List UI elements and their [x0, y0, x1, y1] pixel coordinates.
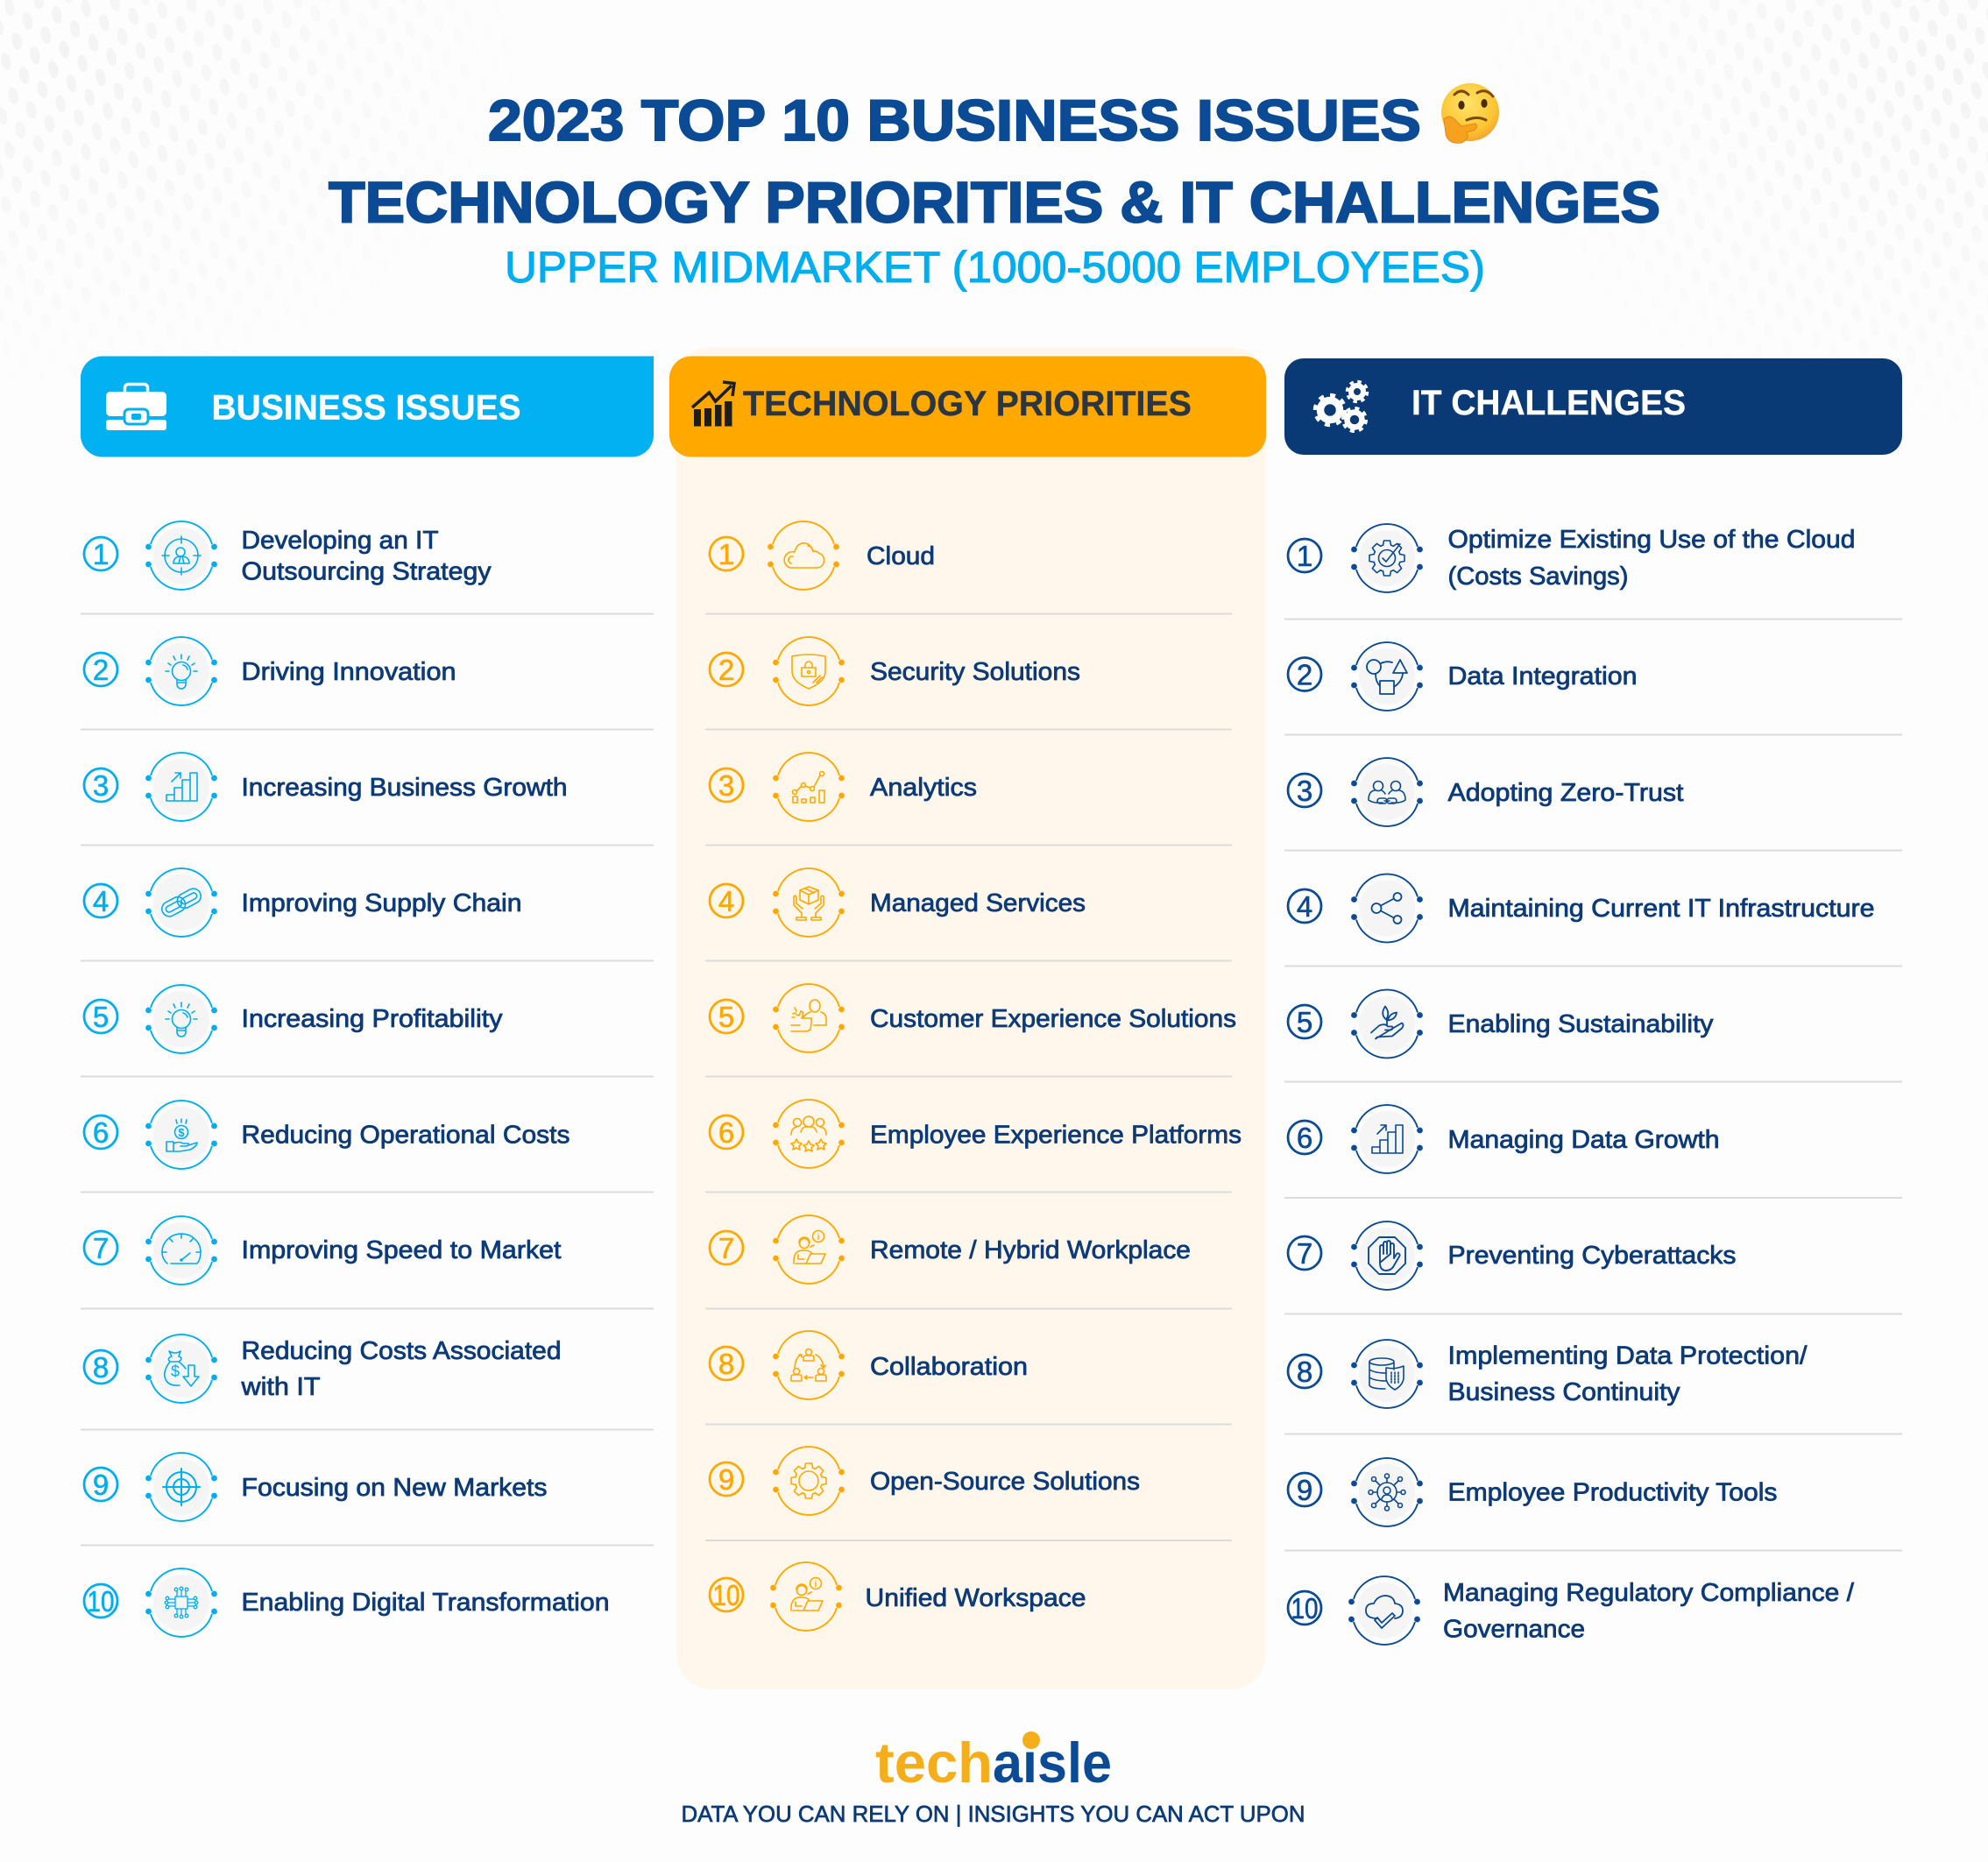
- item text: Enabling Digital Transformation: [242, 1589, 610, 1617]
- number 7: 7: [718, 1232, 734, 1264]
- item 9: open-source solutions: [710, 1447, 1140, 1515]
- item 1: cloud: [710, 521, 935, 590]
- item 4: maintaining current IT infrastructure: [1288, 874, 1875, 942]
- item 3: adopting zero-trust: [1288, 758, 1684, 826]
- logo: techaisle: [875, 1731, 1112, 1795]
- number 6: 6: [718, 1116, 734, 1149]
- item text: Security Solutions: [870, 658, 1080, 686]
- icon: rising bar chart: [692, 382, 734, 426]
- number 7: 7: [1297, 1237, 1312, 1270]
- item text: Preventing Cyberattacks: [1447, 1242, 1737, 1270]
- item text: Improving Supply Chain: [242, 889, 522, 917]
- number 3: 3: [718, 769, 734, 802]
- item text: (Costs Savings): [1447, 563, 1628, 591]
- item 5: customer experience solutions: [710, 984, 1236, 1052]
- number 10: 10: [88, 1585, 114, 1618]
- number 5: [710, 1000, 743, 1033]
- number 7: [84, 1231, 117, 1264]
- number 4: 4: [93, 885, 109, 917]
- number 8: [84, 1350, 117, 1384]
- item 9: employee productivity tools: [1288, 1458, 1777, 1526]
- item text: Employee Experience Platforms: [870, 1122, 1242, 1150]
- icon: collaboration cycle: [773, 1331, 845, 1399]
- icon: analytics chart: [773, 753, 845, 821]
- icon: gear: [773, 1447, 845, 1515]
- item text: Open-Source Solutions: [870, 1468, 1140, 1496]
- item text: Optimize Existing Use of the Cloud: [1447, 526, 1856, 554]
- number 8: [1288, 1355, 1321, 1388]
- number 5: [84, 1000, 117, 1033]
- item 6: managing data growth: [1288, 1105, 1719, 1173]
- item text: Increasing Business Growth: [242, 774, 568, 802]
- number 9: [1288, 1473, 1321, 1506]
- title: TECHNOLOGY PRIORITIES & IT CHALLENGES: [329, 170, 1660, 235]
- number 9: 9: [718, 1463, 734, 1496]
- logo: techaisle: aisle: [993, 1731, 1112, 1795]
- number 9: 9: [93, 1469, 109, 1501]
- number 7: [1288, 1236, 1321, 1270]
- number 2: [1288, 657, 1321, 690]
- number 3: 3: [1297, 775, 1312, 807]
- item 8: collaboration: [710, 1331, 1028, 1399]
- icon: hand with coin: [145, 1101, 217, 1169]
- icon: person network: [1351, 1458, 1423, 1526]
- title: 2023 TOP 10 BUSINESS ISSUES: [488, 88, 1421, 152]
- number 5: 5: [718, 1001, 734, 1033]
- item text: Employee Productivity Tools: [1447, 1479, 1777, 1507]
- item text: [1443, 1579, 1855, 1644]
- number 1: [1288, 539, 1321, 572]
- item 9: focusing on new markets: [84, 1453, 547, 1521]
- number 5: 5: [1297, 1006, 1312, 1038]
- header: business issues: BUSINESS ISSUES: [212, 389, 520, 428]
- panel: IT challenges: [1284, 358, 1902, 1645]
- number 6: 6: [93, 1116, 109, 1149]
- item text: Analytics: [870, 774, 977, 802]
- icon: growth bars: [145, 753, 217, 821]
- number 4: [1288, 889, 1321, 923]
- number 4: [84, 884, 117, 917]
- item 2: driving innovation: [84, 637, 456, 705]
- panel: technology priorities: [669, 356, 1266, 1631]
- icon: thinking face emoji: [1441, 83, 1499, 143]
- item 7: preventing cyberattacks: [1288, 1221, 1737, 1290]
- icon: money bag with arrow: $: [171, 1363, 180, 1380]
- item 1: optimize existing use of the cloud: [1288, 524, 1856, 592]
- icon: light bulb: [145, 985, 217, 1053]
- icon: customer thumbs up: [773, 984, 845, 1052]
- item 6: employee experience platforms: [710, 1100, 1242, 1168]
- item text: Driving Innovation: [242, 658, 456, 686]
- number 7: 7: [93, 1232, 109, 1264]
- number 1: 1: [93, 538, 109, 570]
- item 8: reducing costs associated with IT: [84, 1335, 561, 1403]
- item 5: enabling sustainability: [1288, 990, 1714, 1058]
- number 8: 8: [718, 1348, 734, 1380]
- item text: [1447, 1342, 1808, 1406]
- tagline: DATA YOU CAN RELY ON | INSIGHTS YOU CAN ACT UPON: [682, 1802, 1305, 1827]
- item 10: unified workspace: [710, 1562, 1086, 1631]
- icon: hands holding box: [773, 868, 845, 937]
- item 6: reducing operational costs: [84, 1101, 570, 1169]
- number 2: 2: [1297, 659, 1312, 690]
- header: business issues: [81, 356, 654, 457]
- item text: [240, 1337, 561, 1401]
- number 9: [710, 1462, 743, 1496]
- logo: techaisle: tech: [875, 1731, 993, 1795]
- icon: gear check: [1351, 524, 1423, 592]
- item text: Maintaining Current IT Infrastructure: [1447, 895, 1875, 923]
- item 2: security solutions: [710, 637, 1080, 705]
- item text: Business Continuity: [1447, 1378, 1680, 1406]
- number 6: 6: [1297, 1122, 1312, 1154]
- number 2: 2: [718, 654, 734, 686]
- item text: Cloud: [867, 542, 935, 570]
- icon: team with stars: [773, 1100, 845, 1168]
- header: technology priorities: [669, 356, 1266, 457]
- icon: light bulb: [145, 637, 217, 705]
- item text: Focusing on New Markets: [242, 1474, 547, 1502]
- item 1: developing an IT outsourcing strategy: [84, 521, 492, 590]
- item text: Collaboration: [870, 1353, 1028, 1381]
- number 7: [710, 1231, 743, 1264]
- number 4: 4: [1297, 890, 1312, 923]
- item text: Adopting Zero-Trust: [1447, 779, 1684, 807]
- item text: [1447, 526, 1856, 591]
- item text: Reducing Operational Costs: [242, 1122, 570, 1150]
- number 8: [710, 1347, 743, 1380]
- item 4: improving supply chain: [84, 868, 522, 937]
- icon: shapes integration: [1351, 642, 1423, 711]
- item text: Increasing Profitability: [242, 1005, 503, 1033]
- icon: share nodes: [1351, 874, 1423, 942]
- item text: with IT: [240, 1373, 321, 1401]
- icon: cloud with check: [1348, 1576, 1420, 1645]
- icon: remote worker: [770, 1562, 842, 1631]
- number 2: 2: [93, 654, 109, 686]
- number 10: 10: [713, 1579, 739, 1611]
- icon: money bag with arrow: [145, 1335, 217, 1403]
- item text: Managing Data Growth: [1447, 1126, 1719, 1154]
- panel: business issues: [81, 356, 654, 1637]
- item 2: data integration: [1288, 642, 1637, 711]
- number 3: 3: [93, 769, 109, 802]
- number 10: 10: [1291, 1592, 1318, 1625]
- icon: remote worker: [773, 1215, 845, 1284]
- item text: Implementing Data Protection/: [1447, 1342, 1808, 1370]
- item text: Customer Experience Solutions: [870, 1005, 1236, 1033]
- icon: chip circuit: [145, 1568, 217, 1637]
- number 3: [84, 768, 117, 802]
- number 6: [84, 1115, 117, 1149]
- header: IT challenges: IT CHALLENGES: [1411, 384, 1686, 422]
- item 7: improving speed to market: [84, 1216, 561, 1285]
- item 5: increasing profitability: [84, 985, 503, 1053]
- header: technology priorities: TECHNOLOGY PRIORITIES: [743, 385, 1192, 423]
- item text: Outsourcing Strategy: [242, 557, 492, 585]
- icon: briefcase: [106, 384, 166, 430]
- item 4: managed services: [710, 868, 1086, 937]
- item text: Managing Regulatory Compliance /: [1443, 1579, 1855, 1607]
- number 2: [710, 653, 743, 686]
- icon: hand with coin: $: [178, 1126, 185, 1139]
- number 4: 4: [718, 885, 734, 917]
- number 9: 9: [1297, 1474, 1312, 1506]
- item 10: enabling digital transformation: [84, 1568, 610, 1637]
- number 2: [84, 653, 117, 686]
- number 1: 1: [718, 538, 734, 570]
- icon: stop hand: [1351, 1221, 1423, 1290]
- icon: two people linked: [1351, 758, 1423, 826]
- item text: Developing an IT: [242, 527, 439, 555]
- subtitle: UPPER MIDMARKET (1000-5000 EMPLOYEES): [505, 243, 1485, 292]
- item text: Improving Speed to Market: [242, 1236, 561, 1264]
- icon: shield lock: [773, 637, 845, 705]
- number 4: [710, 884, 743, 917]
- number 3: [710, 768, 743, 802]
- panel: cream background of technology priorities: [676, 347, 1266, 1689]
- item text: Managed Services: [870, 889, 1086, 917]
- icon: database with shield: [1351, 1340, 1423, 1408]
- item text: Remote / Hybrid Workplace: [870, 1236, 1191, 1264]
- number 5: [1288, 1005, 1321, 1038]
- icon: cloud: [768, 521, 839, 590]
- icon: gears: [1315, 382, 1367, 431]
- item 3: analytics: [710, 753, 977, 821]
- number 3: [1288, 774, 1321, 807]
- title: [329, 88, 1660, 235]
- number 1: [84, 537, 117, 570]
- item text: Reducing Costs Associated: [242, 1337, 561, 1365]
- item text: Unified Workspace: [866, 1584, 1086, 1612]
- item text: Enabling Sustainability: [1447, 1010, 1714, 1038]
- number 1: [710, 537, 743, 570]
- item text: Data Integration: [1447, 662, 1637, 690]
- number 8: 8: [1297, 1356, 1312, 1388]
- icon: target person: [145, 521, 217, 590]
- number 5: 5: [93, 1001, 109, 1033]
- header: IT challenges: [1284, 358, 1902, 455]
- item text: Governance: [1443, 1616, 1585, 1644]
- icon: hand with plant: [1351, 990, 1423, 1058]
- item 10: managing regulatory compliance: [1288, 1576, 1855, 1645]
- number 8: 8: [93, 1351, 109, 1384]
- number 6: [1288, 1121, 1321, 1154]
- icon: target: [145, 1453, 217, 1521]
- item 3: increasing business growth: [84, 753, 568, 821]
- icon: speedometer: [145, 1216, 217, 1285]
- number 6: [710, 1115, 743, 1149]
- item 7: remote / hybrid workplace: [710, 1215, 1191, 1284]
- background dot pattern: [0, 11, 1988, 124]
- icon: growth bars: [1351, 1105, 1423, 1173]
- number 9: [84, 1468, 117, 1501]
- icon: chain: [145, 868, 217, 937]
- number 1: 1: [1297, 540, 1312, 572]
- item text: [242, 527, 492, 585]
- item 8: implementing data protection: [1288, 1340, 1808, 1408]
